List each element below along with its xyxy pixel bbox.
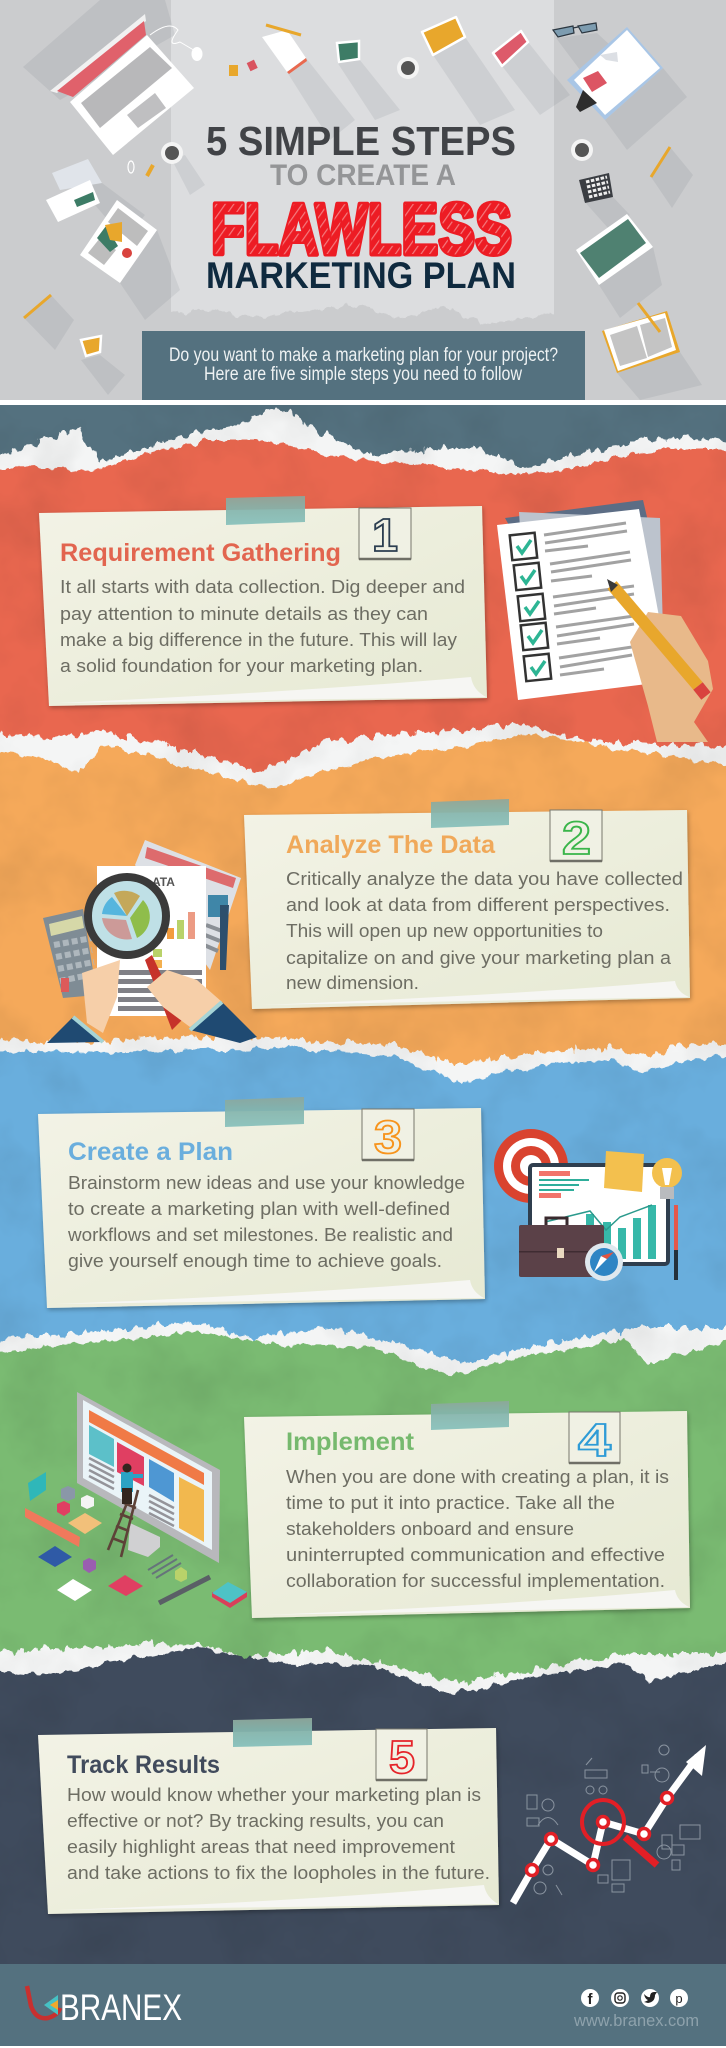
body text: easily highlight areas that need improvement	[67, 1837, 455, 1857]
floating blocks	[25, 1472, 247, 1608]
icon: paperclip and pin	[128, 161, 153, 176]
body text	[67, 1173, 465, 1271]
header desk background	[0, 0, 726, 400]
crumple texture	[0, 405, 726, 1965]
body text: workflows and set milestones. Be realistic and	[67, 1225, 453, 1245]
icon: target, board, briefcase and compass	[494, 1129, 682, 1281]
body text: give yourself enough time to achieve goals.	[68, 1251, 442, 1271]
panel: step 3 create a plan	[38, 1097, 485, 1308]
social icons: f	[588, 1991, 594, 2008]
website url: www.branex.com	[573, 2011, 699, 2030]
icon: yellow card	[81, 336, 101, 356]
icon: red phone	[493, 31, 528, 66]
page curl	[262, 1590, 689, 1615]
icon: checklist with hand and pencil	[497, 500, 713, 742]
note card	[39, 506, 487, 706]
icon: glasses	[553, 23, 597, 37]
panel: step 5 track results	[38, 1718, 499, 1914]
pencil	[220, 905, 229, 970]
tape	[226, 496, 305, 525]
icon: laptop	[50, 14, 202, 155]
icon: envelope	[52, 159, 102, 190]
tape	[431, 1401, 509, 1430]
body text: a solid foundation for your marketing plan.	[60, 656, 423, 676]
icon: green card	[337, 41, 359, 62]
body text: How would know whether your marketing plan is	[67, 1785, 481, 1805]
number tag 5	[376, 1729, 427, 1783]
calculator	[43, 909, 97, 998]
icon: notepad and pencil	[262, 25, 307, 74]
footer band	[0, 1964, 726, 2046]
number tag 2	[550, 810, 602, 864]
tape	[431, 799, 509, 828]
icon: calculator	[579, 173, 613, 203]
panel background: orange torn paper	[0, 726, 726, 1090]
note card	[38, 1728, 499, 1914]
icon: data report with magnifier and hands	[43, 840, 257, 1043]
heading: Track Results	[67, 1751, 220, 1779]
body text	[286, 1467, 669, 1591]
body text: Brainstorm new ideas and use your knowledge	[68, 1173, 465, 1193]
body text: pay attention to minute details as they can	[60, 604, 428, 624]
page curl	[58, 1885, 498, 1910]
body text: Critically analyze the data you have collected	[286, 869, 683, 889]
number tag 4	[569, 1412, 620, 1466]
logo: BRANEX	[60, 1987, 182, 2028]
body text: uninterrupted communication and effective	[286, 1545, 665, 1565]
panel background: red torn paper	[0, 408, 726, 780]
front report: ATA	[152, 875, 175, 889]
title	[206, 118, 516, 296]
monitor stand	[128, 1523, 160, 1557]
long item shadows	[23, 0, 702, 400]
title line: to create a: TO CREATE A	[270, 159, 456, 192]
body text: It all starts with data collection. Dig deeper and	[60, 577, 465, 597]
icon: coffee cup	[397, 57, 419, 79]
note card	[38, 1108, 485, 1308]
number tag 3	[362, 1109, 414, 1163]
panel: step 1 requirement gathering	[39, 496, 487, 706]
torn paper title panel	[171, 0, 554, 324]
icon: pencil	[24, 295, 51, 318]
body text: stakeholders onboard and ensure	[286, 1519, 574, 1539]
divider band	[0, 400, 726, 405]
icon: yellow tablet	[422, 17, 465, 55]
number tag 4: 4	[578, 1414, 612, 1466]
body text: effective or not? By tracking results, you can	[67, 1811, 444, 1831]
panel background: dark torn paper	[0, 1642, 726, 1980]
icon: tablet	[576, 214, 653, 285]
body text: When you are done with creating a plan, it is	[286, 1467, 669, 1487]
icon: coffee cup	[571, 139, 593, 161]
hands and sleeves	[47, 960, 257, 1043]
tape	[225, 1097, 304, 1127]
number tag 1: 1	[372, 509, 398, 561]
intro banner	[142, 331, 585, 400]
icon: document	[80, 200, 157, 283]
monitor	[77, 1392, 220, 1563]
logo	[27, 1986, 182, 2028]
body text	[60, 577, 465, 676]
title line: 5 simple steps: 5 SIMPLE STEPS	[206, 118, 516, 164]
heading: Create a Plan	[68, 1138, 233, 1166]
number tag 5: 5	[389, 1731, 415, 1783]
social icons: p	[675, 1991, 683, 2006]
icon: binder clips	[229, 60, 258, 76]
heading: Implement	[286, 1428, 415, 1456]
chart: rising arrow with magnifier	[513, 1745, 706, 1903]
icon: coffee cup	[161, 142, 183, 164]
icon: business card	[46, 180, 100, 222]
intro banner: Do you want to make a marketing plan for your project?	[169, 345, 558, 366]
body text: new dimension.	[286, 973, 419, 993]
heading: Requirement Gathering	[60, 539, 341, 567]
ladder and person	[108, 1464, 143, 1557]
panel background: green torn paper	[0, 1322, 726, 1700]
note card	[244, 810, 690, 1009]
title line: flawless: FLAWLESS	[211, 190, 512, 270]
icon: isometric monitor with ladder and blocks	[25, 1392, 247, 1608]
panel background: blue torn paper	[0, 1036, 726, 1380]
note card	[244, 1411, 690, 1618]
page curl	[262, 981, 689, 1005]
panel: step 2 analyze the data	[244, 799, 690, 1009]
bottom strip	[0, 2046, 726, 2048]
body text: to create a marketing plan with well-defined	[68, 1199, 450, 1219]
social icons	[581, 1989, 688, 2008]
icon: notebook and pencil	[602, 303, 680, 373]
number tag 2: 2	[562, 812, 591, 864]
icon: clipboard	[567, 27, 663, 120]
body text: and take actions to fix the loopholes in the future.	[67, 1863, 490, 1883]
top dark band	[0, 405, 726, 505]
body text: time to put it into practice. Take all the	[286, 1493, 615, 1513]
panel: step 4 implement	[244, 1401, 690, 1618]
intro banner: Here are five simple steps you need to follow	[204, 364, 522, 385]
icon: pencil	[651, 147, 670, 177]
body text: make a big difference in the future. This will lay	[60, 630, 457, 650]
page curl	[56, 1280, 484, 1304]
tape	[233, 1718, 312, 1747]
magnifier with pie chart	[88, 877, 182, 1030]
page curl	[58, 677, 486, 703]
body text: collaboration for successful implementation.	[286, 1571, 665, 1591]
body text	[286, 869, 683, 993]
number tag 1	[359, 508, 411, 561]
back report	[135, 840, 241, 970]
heading: Analyze The Data	[286, 831, 496, 859]
body text	[67, 1785, 490, 1883]
body text: and look at data from different perspectives.	[286, 895, 670, 915]
body text: This will open up new opportunities to	[286, 921, 603, 941]
front report	[97, 866, 206, 1016]
title line: marketing plan: MARKETING PLAN	[206, 255, 516, 296]
body text: capitalize on and give your marketing plan a	[286, 948, 672, 968]
number tag 3: 3	[374, 1111, 402, 1163]
